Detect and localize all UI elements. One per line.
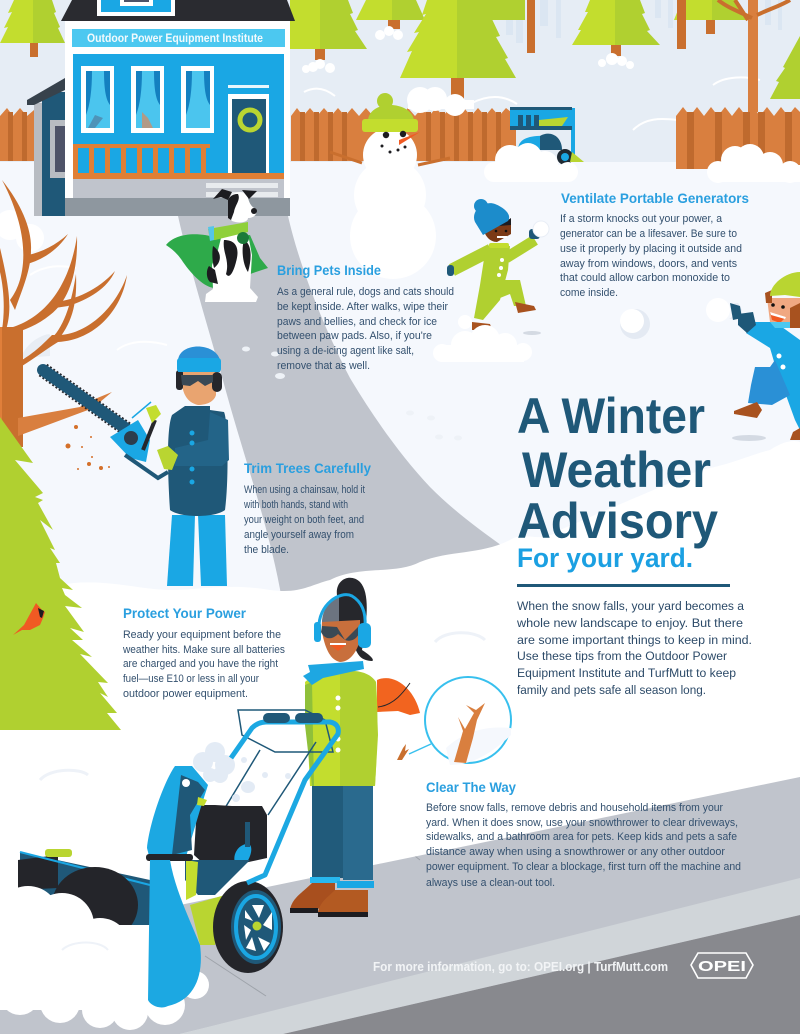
- main title: [517, 388, 718, 573]
- heading: ventilate portable generators: Ventilate Portable Generators: [561, 190, 749, 206]
- heading: bring pets inside: Bring Pets Inside: [277, 262, 381, 278]
- heading: protect your power: are charged and you have the right: [123, 658, 279, 670]
- intro paragraph: Equipment Institute and TurfMutt to keep: [517, 666, 736, 680]
- heading: clear the way: always use a clean-out tool.: [426, 877, 555, 889]
- pants: [167, 515, 227, 586]
- coat: [305, 672, 377, 786]
- pine tree left with cardinal: [0, 417, 121, 730]
- sawdust particles: [66, 425, 110, 470]
- heading: protect your power: outdoor power equipment.: [123, 688, 248, 700]
- house annex: [27, 78, 66, 216]
- woman operating snowblower: [290, 578, 420, 917]
- dog body: [205, 234, 258, 302]
- snow bank: [0, 441, 800, 935]
- cape: [166, 234, 268, 288]
- heading: trim trees carefully: Trim Trees Carefully: [244, 460, 371, 476]
- chainsaw: [18, 370, 178, 478]
- engine: [194, 805, 267, 865]
- boots: [290, 883, 368, 917]
- heading: clear the way: distance away when using a snowthrower or any other outdoor: [426, 846, 725, 858]
- snowball and shadows: [523, 309, 766, 441]
- heading: clear the way: power equipment. To clear a blockage, first turn off the machine and: [426, 861, 741, 873]
- intro paragraph: Use these tips from the Outdoor Power: [517, 649, 727, 663]
- head: [213, 189, 257, 222]
- bare tree left: [0, 180, 127, 447]
- heading: protect your power: [122, 605, 285, 700]
- intro paragraph: When the snow falls, your yard becomes a: [517, 599, 744, 613]
- heading: clear the way: Before snow falls, remove debris and household items from your: [426, 802, 723, 814]
- background pine trees: [0, 0, 800, 100]
- snow mound under kid: [433, 315, 532, 362]
- heading: bring pets inside: between paw pads. Also, if you're: [277, 330, 432, 342]
- heading: ventilate portable generators: generator can be a lifesaver. Be sure to: [560, 228, 737, 240]
- snowman hat: [362, 93, 418, 132]
- heading: protect your power: weather hits. Make sure all batteries: [122, 644, 285, 656]
- handle frame: [225, 710, 333, 815]
- sidewalk and street: [0, 726, 800, 1034]
- magnified twig callout: [397, 677, 511, 765]
- intro paragraph: family and pets safe all season long.: [517, 683, 706, 697]
- bare tree upper right: [718, 0, 790, 112]
- kid one throwing snowball: [447, 199, 549, 330]
- heading: bring pets inside: remove that as well.: [277, 360, 370, 372]
- umbrella: [377, 678, 420, 715]
- heading: ventilate portable generators: come inside.: [560, 287, 618, 299]
- windows: [81, 66, 214, 133]
- heading: protect your power: fuel—use E10 or less in all your: [123, 673, 259, 685]
- OPEI logo: OPEI: [698, 958, 746, 975]
- footer link: For more information, go to: OPEI.org | TurfMutt.com: [373, 960, 668, 974]
- head: [182, 372, 216, 405]
- pants: [312, 786, 343, 878]
- headphones: [319, 595, 365, 628]
- snowman: [330, 93, 450, 279]
- porch railing: [73, 144, 284, 179]
- hat: [178, 346, 220, 372]
- heading: trim trees carefully: [243, 460, 371, 556]
- heading: bring pets inside: As a general rule, dogs and cats should: [277, 286, 454, 298]
- driveway path: [178, 216, 505, 600]
- heading: protect your power: Ready your equipment before the: [123, 629, 281, 641]
- cardinal: [13, 603, 45, 635]
- collar: [208, 222, 248, 240]
- chainsaw operator: [18, 346, 229, 586]
- handle bar: [231, 722, 338, 883]
- heading: ventilate portable generators: [560, 190, 749, 299]
- main title: A Winter: [517, 388, 705, 444]
- blower body: [185, 860, 250, 895]
- heading: trim trees carefully: angle yourself away from: [244, 529, 354, 541]
- snow pile: [0, 886, 209, 1030]
- house: [61, 0, 295, 216]
- main title: Weather: [522, 442, 711, 498]
- wheel: [213, 881, 283, 973]
- discharge chute: [147, 766, 208, 860]
- heading: bring pets inside: [277, 262, 454, 372]
- intro paragraph: whole new landscape to enjoy. But there: [516, 616, 743, 630]
- fence sections: [0, 107, 800, 169]
- heading: bring pets inside: be kept inside. After walks, wipe their: [277, 301, 448, 313]
- heading: trim trees carefully: When using a chainsaw, hold it: [244, 484, 366, 496]
- generator: [510, 107, 584, 165]
- auger housing: [20, 852, 150, 960]
- heading: ventilate portable generators: away from windows, doors, and vents: [560, 258, 737, 270]
- coat: [168, 406, 228, 516]
- heading: ventilate portable generators: If a storm knocks out your power, a: [560, 213, 723, 225]
- heading: ventilate portable generators: use it properly by placing it outside and: [560, 243, 742, 255]
- heading: ventilate portable generators: that could allow carbon monoxide to: [560, 272, 730, 284]
- dog mascot with cape: [166, 189, 268, 302]
- heading: clear the way: yard. When it does snow, use your snowthrower to clear driveways,: [426, 817, 738, 829]
- OPEI logo: [691, 953, 753, 978]
- heading: trim trees carefully: the blade.: [244, 544, 289, 556]
- main title: For your yard.: [517, 543, 693, 573]
- kid two with lime hat: [706, 272, 800, 440]
- snow spray: [193, 742, 291, 802]
- intro paragraph: [516, 599, 752, 697]
- snow mounds: [0, 26, 800, 252]
- heading: clear the way: sidewalks, and a bathroom area for pets. Keep kids and pets a safe: [426, 831, 737, 843]
- main title: Advisory: [517, 493, 718, 549]
- intro paragraph: are some important things to keep in mind.: [517, 633, 752, 647]
- scarf: [303, 661, 364, 685]
- heading: bring pets inside: paws and bellies, and check for ice: [277, 316, 437, 328]
- house sign: Outdoor Power Equipment Institute: [87, 31, 263, 45]
- heading: clear the way: [426, 779, 741, 889]
- face: [322, 620, 360, 662]
- front door with wreath: [228, 85, 269, 174]
- snowblower: [0, 710, 338, 1030]
- heading: trim trees carefully: your weight on both feet, and: [244, 514, 364, 526]
- roof and dormer: [61, 0, 295, 21]
- heading: protect your power: Protect Your Power: [123, 605, 247, 621]
- heading: trim trees carefully: with both hands, stand with: [243, 499, 348, 511]
- heading: clear the way: Clear The Way: [426, 779, 516, 795]
- heading: bring pets inside: using a de-icing agent like salt,: [277, 345, 414, 357]
- hair: [337, 578, 373, 661]
